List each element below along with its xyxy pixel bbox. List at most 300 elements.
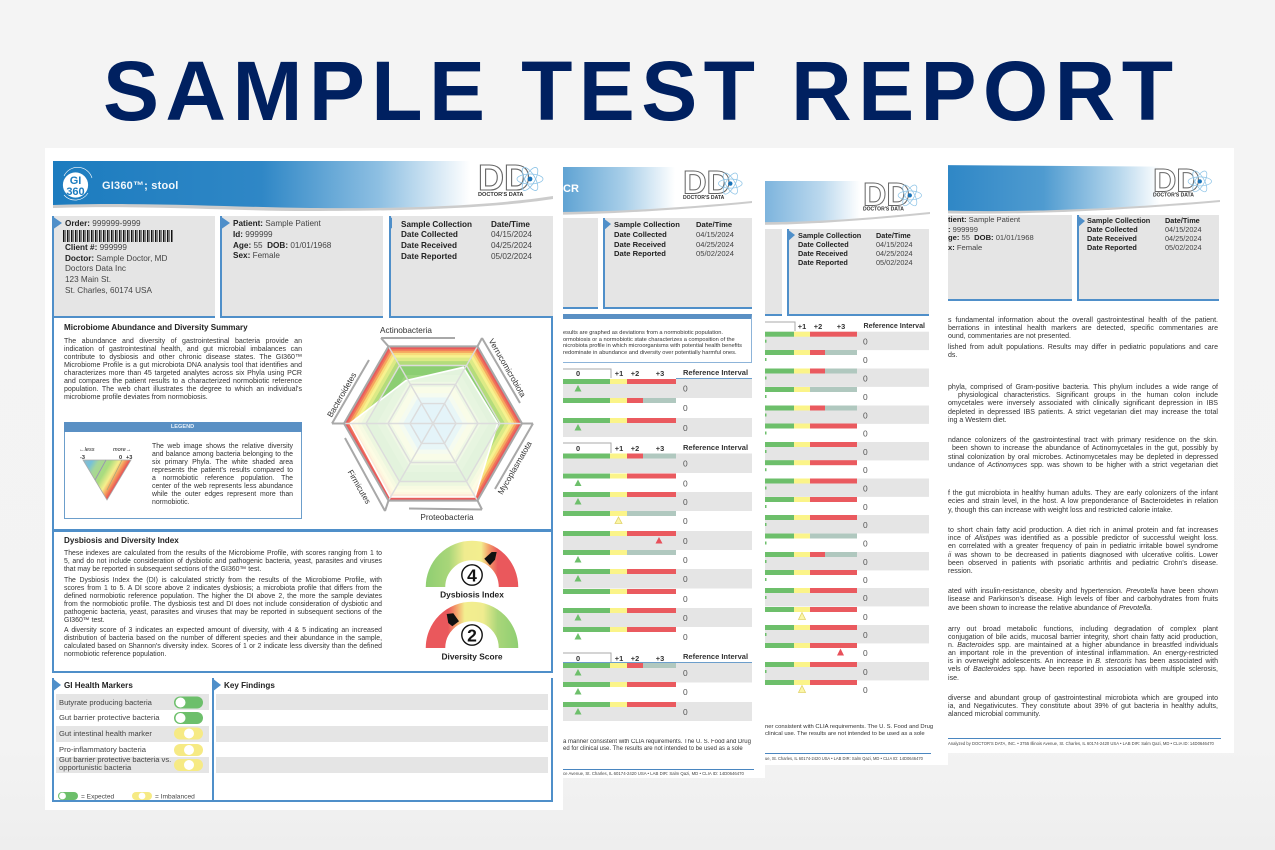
sample dates box: Date Received: [401, 241, 457, 250]
page 2 sample dates box: 04/15/2024: [696, 230, 734, 238]
page 3 box marker: [789, 230, 795, 240]
logo: Doctor's Data: DOCTOR'S DATA: [863, 207, 904, 213]
icon: GI360 badge: [63, 167, 92, 200]
page 3 rows: [765, 332, 929, 695]
page 4 Bacteroidetes text: ecies and strain level, in the host. A low preponderance of Bacteroidetes in relation: [948, 498, 1218, 505]
page 4 intro paragraph: s fundamental information about the overall gastrointestinal health of the patient.: [948, 317, 1218, 324]
page 2 table header 3: 0: [576, 654, 580, 663]
page 3 rows: 0: [863, 612, 868, 622]
panel: GI health markers: [52, 678, 212, 802]
page 4 Actinobacteria text: ing a Western diet.: [948, 417, 1007, 424]
dysbiosis text: distribution of bacteria based on the number of different species and their abundance in the sample,: [64, 635, 382, 642]
gauge: diversity score: Diversity Score: [442, 652, 503, 662]
page 4 Prevotella text: lisease and Parkinson's disease. High levels of fiber and carbohydrates from fruits: [948, 596, 1218, 603]
page 1 banner: [53, 158, 553, 211]
page 2 rows group 2: 0: [683, 536, 688, 546]
page 4 Verrucomicrobiota text: undance of Actinomyces spp. was shown to be higher with a strict vegetarian diet: [948, 462, 1218, 469]
toggle: intestinal imbalanced: [174, 728, 203, 740]
page 2 rows group 2: 0: [683, 458, 688, 468]
legend triangle icon: -3: [80, 455, 85, 461]
page 2 rows group 3: 0: [683, 707, 688, 717]
page 2 box marker: [605, 220, 611, 230]
gauge: diversity score: 2: [467, 626, 477, 646]
page 4 sample dates box: 04/25/2024: [1165, 234, 1202, 243]
page 4 Verrucomicrobiota text: ndance colonizers of the gastrointestinal tract with primary residence on the skin.: [948, 437, 1218, 444]
page 4 patient details: [948, 215, 1034, 252]
legend text: represents the patient's results compared to: [152, 467, 293, 474]
page 3 sample dates box: 04/25/2024: [876, 248, 913, 258]
page 3 sample dates box: Date Reported: [798, 258, 848, 267]
page 2 sample dates box: Date Reported: [614, 249, 666, 258]
marker label 5: opportunistic bacteria: [59, 763, 131, 772]
page 3 sample dates box: Date Collected: [798, 240, 849, 248]
dysbiosis heading: Dysbiosis and Diversity Index: [64, 536, 179, 544]
GI health markers heading: GI Health Markers: [64, 681, 133, 690]
page 4 Actinobacteria text: depleted in depressed IBS patients. A strict vegetarian diet may increase the total: [948, 409, 1218, 416]
patient result polygon: [350, 367, 498, 497]
page 4 Bacteroides text: ise.: [948, 675, 959, 682]
toggle: butyrate expected: [174, 696, 203, 708]
key findings row 3: [216, 726, 548, 742]
page 3 sample dates box: Date/Time: [876, 230, 911, 240]
page 3 disclaimer: clinical use. The results are not intended to be used as a sole: [765, 731, 925, 737]
marker row backgrounds: [56, 694, 209, 710]
page 2 explanation callout: redominate in abundance and diversity over potentially harmful ones.: [563, 350, 737, 356]
phylum axis labels: Proteobacteria: [420, 513, 474, 522]
page 2 table header 2: +2: [631, 444, 639, 453]
page 2 table header 2: Reference Interval: [683, 443, 748, 452]
page 4 sample dates box: Date Collected: [1087, 225, 1138, 234]
legend header: LEGEND: [171, 424, 194, 430]
summary text: [64, 338, 302, 401]
report page 2: results table: [550, 148, 765, 778]
page 2 disclaimer: a manner consistent with CLIA requirements. The U. S. Food and Drug: [563, 739, 751, 745]
legend triangle icon: +3: [126, 455, 132, 461]
dysbiosis text: These indexes are calculated from the results of the Microbiome Profile, with scores ranging from 1 to: [64, 550, 382, 557]
page 3 rows: 0: [863, 593, 868, 603]
page 4 Prevotella text: ave been shown to increase the relative abundance of Prevotella.: [948, 605, 1152, 612]
icon: GI360 badge: 360: [66, 186, 85, 198]
page 3 middle box: [750, 229, 782, 316]
legend: expected: [58, 792, 115, 800]
page 4 Actinobacteria text: phyla, comprised of Gram-positive bacteria. This phylum includes a wide range of: [948, 384, 1218, 391]
patient box: Id: 999999: [233, 230, 273, 239]
page 4 intro paragraph: lished from adult populations. Results may differ in pediatric populations and care: [948, 344, 1218, 351]
page 3 rows: 0: [863, 374, 868, 384]
sample dates box: Date Collected: [401, 230, 458, 239]
page 3 table header: +3: [837, 322, 845, 331]
page 3 sample dates box: 05/02/2024: [876, 258, 913, 267]
dysbiosis text: normobiotic reference population.: [64, 651, 166, 658]
page 3 disclaimer: ner consistent with CLIA requirements. The U. S. Food and Drug: [765, 724, 933, 730]
logo: Doctor's Data: [478, 157, 543, 198]
page 3 banner: [765, 176, 930, 225]
page 4 patient details: x: Female: [948, 243, 982, 252]
dysbiosis text: 5, and do not include consideration of dysbiotic and pathogenic bacteria, yeast, parasites and viruses: [64, 558, 382, 565]
page 3 rows: 0: [863, 355, 868, 365]
page 4 sample dates box: [1077, 215, 1219, 301]
page 2 rows group 1: 0: [683, 423, 688, 433]
legend: imbalanced: = Imbalanced: [155, 794, 195, 800]
page 2 rows group 2: 0: [683, 632, 688, 642]
page 2 table header 3: +1: [615, 654, 623, 663]
order and client box: [52, 216, 215, 318]
page 2 table header 1: 0: [576, 369, 580, 378]
page 4 Alistipes text: ince of Alistipes was identified as a possible predictor of successful weight loss.: [948, 535, 1218, 542]
page 4 Alistipes text: ression.: [948, 568, 973, 575]
summary heading: Microbiome Abundance and Diversity Summary: [64, 323, 248, 332]
page 2 table header 2: +1: [615, 444, 623, 453]
phylum axis labels: Verrucomicrobiota: [487, 337, 528, 399]
logo: Doctor's Data: DOCTOR'S DATA: [683, 195, 725, 201]
page 3 rows: 0: [863, 557, 868, 567]
summary text: and compares the patient results to a characterized normobiotic reference: [64, 378, 302, 385]
page 2 table header 3: +2: [631, 654, 639, 663]
web rings and spokes: [344, 346, 522, 501]
legend text: [152, 442, 293, 506]
page 4 intro paragraph: [948, 316, 1218, 359]
page 4 intro paragraph: berrations in intestinal health markers are detected, specific commentaries are: [948, 325, 1218, 332]
patient box: Sex: Female: [233, 251, 280, 260]
legend text: center of the web represents less abundance: [152, 483, 293, 490]
page 3 rows: 0: [863, 410, 868, 420]
page 4 Verrucomicrobiota text: been shown to increase the abundance of Actinomycetales in the gut, possibly by: [952, 445, 1218, 452]
page 4 banner: [948, 162, 1220, 214]
page 4 footer: Analyzed by DOCTOR'S DATA, INC. • 3755 Illinois Avenue, St. Charles, IL 60174-2420 USA • LAB DIR: Salm Qazi, MD • CLIA ID: 14D0646470: [948, 741, 1214, 746]
logo: Doctor's Data: D: [886, 176, 910, 212]
gauge: diversity score: [436, 611, 508, 662]
summary text: microbiome profile deviates from normobiosis.: [64, 394, 208, 401]
legend text: The web image shows the relative diversity: [152, 443, 293, 450]
page 2 sample dates box: 04/25/2024: [696, 240, 734, 248]
order and client box: 123 Main St.: [65, 275, 111, 284]
page 2 rows group 2: 0: [683, 478, 688, 488]
page 4 Bacteroidetes text: y, though this can increase with weight loss and restricted calorie intake.: [948, 507, 1173, 514]
marker label 3: Gut intestinal health marker: [59, 729, 152, 738]
page 4 sample dates box: Date/Time: [1165, 216, 1200, 225]
page 2 explanation callout: esults are graphed as deviations from a normobiotic population.: [563, 330, 723, 336]
panel: microbiome abundance and diversity summary: [52, 318, 553, 531]
page 2 rows group 3: 0: [683, 687, 688, 697]
logo: Doctor's Data: [683, 164, 742, 201]
report page 4: background information: [930, 148, 1234, 753]
page 2 rows group 2: 0: [683, 574, 688, 584]
page 4 sample dates box: Date Received: [1087, 234, 1137, 243]
report page 3: results table: [750, 148, 948, 765]
page 2 banner: [563, 164, 752, 215]
page 4 Bacteroides text: an important role in the prevention of intestinal inflammation. An energy-restricted: [948, 650, 1218, 657]
gauge: dysbiosis index: Dysbiosis Index: [440, 590, 504, 600]
dysbiosis text: scores from 1 to 5. A DI score above 2 indicates dysbiosis; a microbiota profile that differs from the: [64, 585, 382, 592]
page 3 rows: 0: [863, 520, 868, 530]
page 2 footer: [563, 769, 754, 779]
page 4 sample dates box: 04/15/2024: [1165, 225, 1202, 234]
sample dates box: 04/15/2024: [491, 230, 532, 239]
page 4 Alistipes text: to short chain fatty acid production. A diet rich in animal protein and fat increases: [948, 527, 1218, 534]
page 2 table header 2: +3: [656, 444, 664, 453]
page 2 table header 1: +2: [631, 369, 639, 378]
page 4 Firmicutes text: ia, and Negativicutes. They constitute about 39% of gut bacteria in healthy adults,: [948, 703, 1218, 710]
page 2 rows group 1: 0: [683, 384, 688, 394]
dysbiosis text: pathogenic bacteria, yeast, parasites and viruses that may be reported in subsequent sections of the: [64, 609, 382, 616]
panel: key findings: [212, 678, 553, 802]
page 4 intro paragraph: ound, commentaries are not presented.: [948, 333, 1071, 340]
legend text: normobiotic.: [152, 499, 190, 506]
page 2 explanation callout: [550, 314, 752, 363]
legend text: while the outer edges represent more than: [152, 491, 293, 498]
page 2 footer: ce Avenue, St. Charles, IL 60174-2420 USA • LAB DIR: Salm Qazi, MD • CLIA ID: 14D0646470: [563, 771, 744, 776]
page 2 middle box: [550, 218, 598, 309]
marker label 5: Gut barrier protective bacteria vs.: [59, 755, 171, 764]
page 3 sample dates box: Sample Collection: [798, 230, 861, 240]
page 3 footer: ue, St. Charles, IL 60174-2420 USA • LAB DIR: Salm Qazi, MD • CLIA ID: 14D0646470: [765, 756, 923, 761]
page 2 rows group 2: 0: [683, 516, 688, 526]
page 3 rows: 0: [863, 538, 868, 548]
toggle: barrier vs opportunistic imbalanced: [174, 759, 203, 771]
sample dates box: Date Reported: [401, 252, 457, 261]
page 2 rows group 2: 0: [683, 497, 688, 507]
summary text: Microbiome Profile is a gut microbiota DNA analysis tool that identifies and: [64, 362, 302, 369]
page 2 rows group 2: 0: [683, 555, 688, 565]
page 4 Bacteroides text: vels of Bacteroides spp. have been reported in association with multiple sclerosis,: [948, 666, 1218, 673]
web color bands: [344, 346, 522, 501]
order and client box: Doctors Data Inc: [65, 264, 126, 273]
logo: Doctor's Data: DOCTOR'S DATA: [1153, 193, 1194, 199]
sample dates box: 04/25/2024: [491, 241, 532, 250]
sample dates box: [389, 216, 553, 318]
marker toggles: [58, 696, 203, 800]
page 2 table header 1: [563, 368, 752, 378]
page 3 rows: 0: [863, 667, 868, 677]
page 2 disclaimer: ed for clinical use. The results are not intended to be used as a sole: [563, 746, 743, 752]
page 3 table header: +2: [814, 322, 822, 331]
page 3 rows: 0: [863, 428, 868, 438]
logo: Doctor's Data: D: [863, 176, 886, 212]
page 3 rows: 0: [863, 465, 868, 475]
page 2 table header 1: +3: [656, 369, 664, 378]
order and client box: Order: 999999-9999: [65, 219, 141, 228]
page 4 Alistipes text: en correlated with a greater frequency of pain in pediatric irritable bowel syndrome: [948, 543, 1218, 550]
page 3 rows: 0: [863, 337, 868, 347]
logo: Doctor's Data: D: [683, 164, 707, 201]
page 3 rows: 0: [863, 575, 868, 585]
dysbiosis text: [64, 550, 382, 658]
page 3 rows: 0: [863, 392, 868, 402]
legend: imbalanced: [132, 792, 195, 800]
page 2 results table: [563, 368, 752, 721]
report title: GI360™; stool: [102, 180, 179, 192]
page 2 rows group 1: 0: [683, 403, 688, 413]
page 4 Alistipes text: [948, 526, 1218, 575]
gauges: [426, 540, 518, 662]
report page 1: main summary: [45, 148, 563, 810]
marker label 5: [59, 755, 171, 772]
page 3 rows: 0: [863, 685, 868, 695]
bottom panel corner markers: [54, 680, 221, 690]
page 2 disclaimer: [563, 739, 751, 752]
page 3 table header: +1: [798, 322, 806, 331]
icon: GI360 badge: GI: [70, 175, 81, 187]
logo: Doctor's Data: D: [1176, 162, 1200, 198]
page 2 table header 2: [563, 443, 748, 453]
page 2 rows group 3: 0: [683, 668, 688, 678]
dysbiosis text: The Dysbiosis Index the (DI) is calculated strictly from the results of the Microbiome Profile, with: [64, 577, 382, 584]
logo: Doctor's Data: D: [707, 164, 730, 201]
page 4 Bacteroides text: n. Bacteroides spp. are maintained at a higher abundance in breastfed individuals: [948, 642, 1218, 649]
key findings row 5: [216, 757, 548, 773]
page 4 Prevotella text: [948, 588, 1218, 612]
page 4 Verrucomicrobiota text: stinal colonization by oral microbes. Actinomycetales may be depleted in depressed: [948, 454, 1218, 461]
page 4 Bacteroides text: arry out broad metabolic functions, including degradation of complex plant: [948, 626, 1218, 633]
summary text: contribute to dysbiosis and other chronic disease states. The GI360™: [64, 354, 302, 361]
dysbiosis text: calculated based on Shannon's diversity index. Scores of 1 or 2 indicate less diversity than the defined: [64, 643, 382, 650]
page 2 sample dates box: Sample Collection: [614, 220, 680, 229]
page 3 sample dates box: [787, 229, 929, 316]
key findings row 1: [216, 694, 548, 710]
page 2 rows group 2: 0: [683, 613, 688, 623]
radar web chart: [326, 326, 534, 522]
page 4 footer: [948, 738, 1221, 749]
page 4 Bacteroides text: is in overweight adolescents. An increase in B. stercoris has been associated with: [948, 658, 1218, 665]
gauge: dysbiosis index: [436, 550, 508, 600]
legend text: six primary Phyla. The white shaded area: [152, 459, 293, 466]
page 2 explanation callout: nicrobiota profile in which microorganisms with potential health benefits: [563, 343, 742, 349]
page 2 table header 1: +1: [615, 369, 623, 378]
logo: Doctor's Data: DOCTOR'S DATA: [478, 192, 523, 198]
box corner markers: [54, 218, 392, 228]
page 4 Bacteroidetes text: [948, 490, 1218, 514]
page 2 table header 3: +3: [656, 654, 664, 663]
legend triangle icon: [79, 447, 132, 500]
order and client box: Client #: 999999: [65, 243, 127, 252]
page 4 Actinobacteria text: physiological characteristics. Significant groups in the human colon include: [958, 392, 1218, 399]
page 4 Firmicutes text: [948, 694, 1218, 718]
sample dates box: Date/Time: [491, 220, 530, 228]
page 4 Actinobacteria text: [948, 384, 1218, 424]
dysbiosis text: GI360™ test.: [64, 617, 105, 624]
page 3 rows: 0: [863, 484, 868, 494]
marker row background 5: [56, 757, 209, 773]
toggle: barrier expected: [174, 712, 203, 724]
key findings heading: Key Findings: [224, 681, 275, 690]
toggle: pro-inflammatory imbalanced: [174, 744, 203, 756]
page 3 rows: 0: [863, 502, 868, 512]
page 2 sample dates box: Date/Time: [696, 220, 732, 229]
page 2 sample dates box: Date Collected: [614, 230, 667, 238]
dysbiosis text: defined normobiotic reference population. The higher the DI above 2, the more the sample deviates: [64, 593, 382, 600]
marker label 4: Pro-inflammatory bacteria: [59, 745, 146, 754]
legend panel: [64, 422, 302, 519]
page 4 Bacteroides text: [948, 626, 1218, 682]
legend triangle icon: ←less: [79, 447, 95, 453]
page 2 banner: CR: [563, 183, 579, 195]
page 2 sample dates box: 05/02/2024: [696, 249, 734, 258]
page 2 rows group 1: [563, 379, 752, 437]
phylum axis labels: [326, 326, 534, 522]
phylum axis labels: Firmicutes: [346, 468, 372, 506]
logo: Doctor's Data: D: [1153, 162, 1176, 198]
page 4 patient details: ge: 55 DOB: 01/01/1968: [948, 233, 1034, 242]
page 4 Alistipes text: ii was shown to be decreased in patients diagnosed with ulcerative colitis. Lower: [948, 552, 1218, 559]
page 4 sample dates box: Date Reported: [1087, 243, 1137, 252]
page 3 rows: 0: [863, 630, 868, 640]
legend triangle icon: 0: [119, 455, 122, 461]
order and client box: St. Charles, 60174 USA: [65, 286, 152, 295]
page 3 sample dates box: 04/15/2024: [876, 240, 913, 248]
page 4 intro paragraph: ds.: [948, 352, 957, 359]
panel: dysbiosis and diversity index: [52, 530, 553, 673]
summary text: characterizes more than 45 targeted analytes across six Phyla using PCR: [64, 370, 302, 377]
patient box: Age: 55 DOB: 01/01/1968: [233, 241, 331, 250]
dysbiosis text: from the normobiotic profile. The dysbiosis test and DI does not include consideration of dysbiotic and: [64, 601, 382, 608]
page 4 patient details: tient: Sample Patient: [948, 215, 1020, 224]
page 2 table header 3: [563, 652, 752, 663]
page 2 rows group 2: [563, 454, 752, 642]
page 4 Firmicutes text: diverse and abundant group of gastrointestinal microbiota which are grouped into: [948, 695, 1218, 702]
page 3 table header: Reference Interval: [864, 322, 925, 330]
legend text: and balance among bacteria belonging to the: [152, 451, 293, 458]
phylum axis labels: Bacteroidetes: [326, 371, 358, 419]
logo: Doctor's Data: [863, 176, 922, 213]
logo: Doctor's Data: [1153, 162, 1212, 199]
page 2 explanation callout: ormobiosis or a normobiotic state characterizes a composition of the: [563, 337, 735, 343]
page 3 disclaimer: [765, 724, 933, 737]
marker labels: Butyrate producing bacteria: [59, 698, 152, 707]
page 3 rows: 0: [863, 447, 868, 457]
page 4 sample dates box: 05/02/2024: [1165, 243, 1202, 252]
page 4 patient box: [930, 215, 1072, 301]
order and client box: Doctor: Sample Doctor, MD: [65, 254, 167, 262]
dysbiosis text: A diversity score of 3 indicates an expected amount of diversity, with 4 & 5 indicating an increased: [64, 627, 382, 634]
page 2 table header 3: Reference Interval: [683, 652, 748, 661]
page 3 sample dates box: Date Received: [798, 248, 848, 258]
page 4 Verrucomicrobiota text: [948, 436, 1218, 469]
patient box: Patient: Sample Patient: [233, 219, 321, 228]
page 3 table header: [765, 322, 925, 331]
logo: Doctor's Data: D: [504, 158, 530, 198]
gauge: dysbiosis index: 4: [467, 566, 477, 586]
web outer frame: [332, 338, 533, 511]
page 4 Prevotella text: ated with insulin-resistance, obesity and hypertension. Prevotella have been shown: [948, 588, 1218, 595]
marker label 2: Gut barrier protective bacteria: [59, 713, 159, 722]
page 4 Firmicutes text: alanced microbial community.: [948, 711, 1040, 718]
legend triangle icon: more→: [113, 447, 131, 453]
title: SAMPLE TEST REPORT: [103, 44, 1173, 138]
page 2 rows group 3: [563, 663, 752, 721]
dysbiosis text: that may be reported in subsequent sections of the GI360™ test.: [64, 566, 261, 573]
page 3 footer: [765, 753, 931, 764]
page 4 Bacteroides text: conjugation of bile acids, mucosal barrier integrity, short chain fatty acid production,: [948, 634, 1218, 641]
marker row background 3: [56, 726, 209, 742]
sample dates box: 05/02/2024: [491, 252, 532, 261]
page 2 table header 1: Reference Interval: [683, 368, 748, 377]
page 2 rows group 2: 0: [683, 594, 688, 604]
page 3 results table: [765, 322, 929, 695]
page 3 rows: 0: [863, 648, 868, 658]
phylum axis labels: Mycoplasmatota: [496, 440, 534, 496]
legend text: a normobiotic reference population. The: [152, 475, 293, 482]
page 4 Alistipes text: been observed in patients with psoriatic arthritis and pediatric Crohn's disease.: [948, 560, 1218, 567]
phylum axis labels: Actinobacteria: [380, 326, 432, 335]
page 4 box marker: [1079, 216, 1085, 226]
sample dates box: Sample Collection: [401, 220, 472, 228]
logo: Doctor's Data: D: [478, 158, 504, 198]
page 2 sample dates box: Date Received: [614, 240, 666, 248]
page 4 Bacteroidetes text: f the gut microbiota in healthy human adults. They are early colonizers of the infant: [948, 490, 1218, 497]
page 4 sample dates box: Sample Collection: [1087, 216, 1150, 225]
legend header: [64, 422, 302, 432]
patient box: [220, 216, 383, 318]
